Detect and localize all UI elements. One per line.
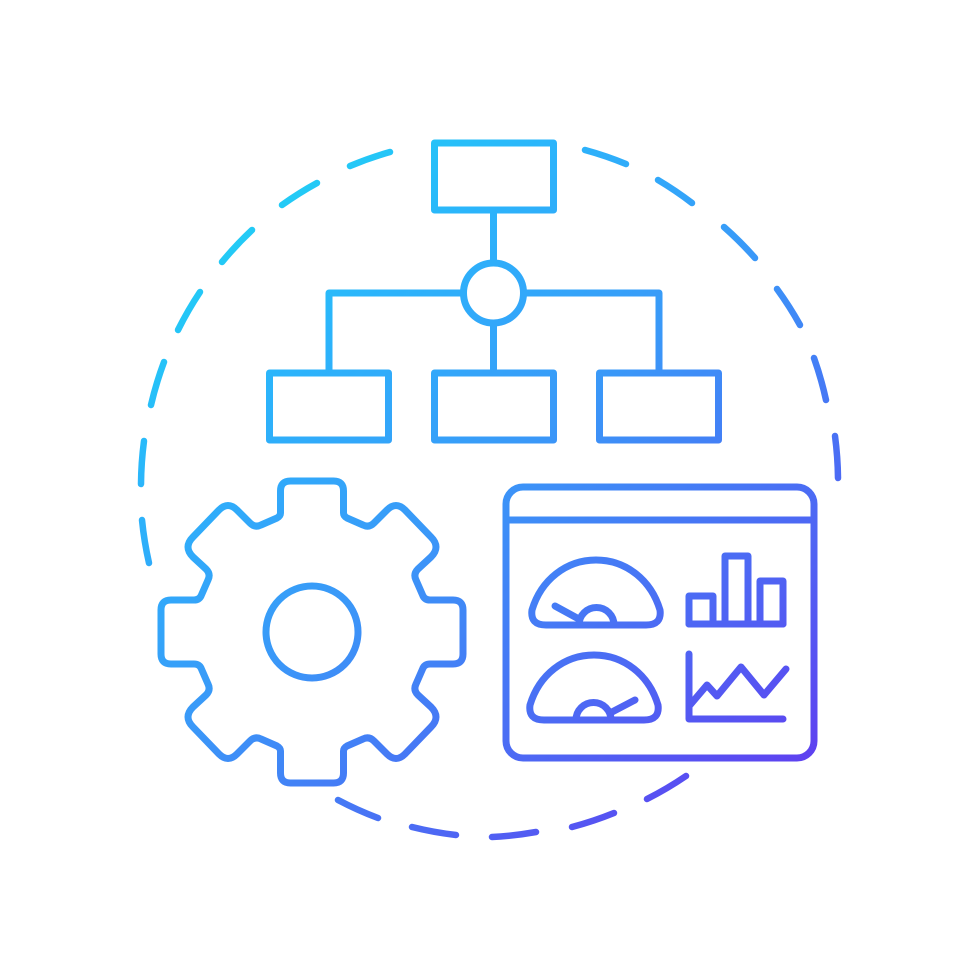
right box (600, 373, 718, 440)
gear hub (266, 586, 358, 678)
gauge bottom (530, 655, 658, 720)
gear outline (161, 481, 463, 783)
dashed circle (141, 150, 838, 837)
gauge top (532, 560, 660, 625)
top box (434, 143, 554, 210)
bar chart (689, 556, 783, 624)
line chart (689, 654, 786, 719)
connectors (329, 210, 659, 372)
gear icon (161, 481, 463, 783)
title bar line (506, 516, 814, 524)
center node (464, 263, 524, 323)
middle box (434, 373, 554, 440)
window frame (506, 487, 814, 758)
dashboard window (506, 487, 814, 758)
left box (270, 373, 388, 440)
org chart (270, 143, 718, 440)
